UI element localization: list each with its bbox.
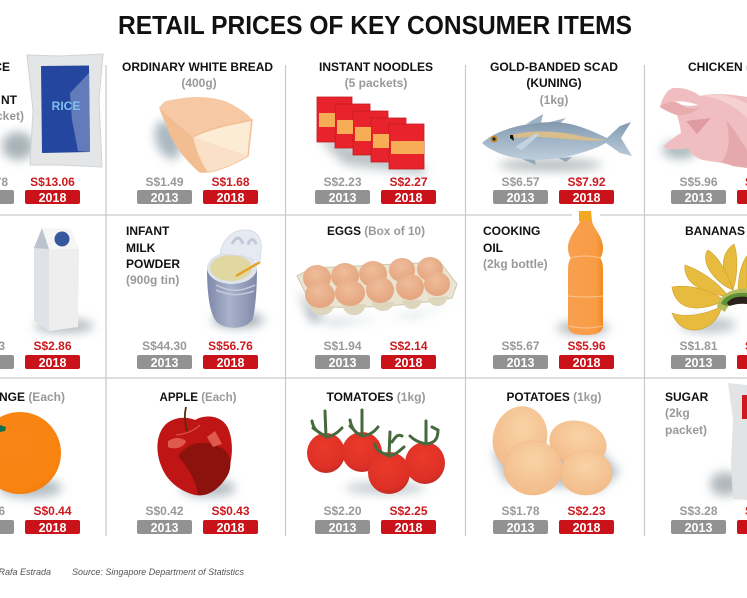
panel: sugar bbox=[665, 383, 747, 535]
noodles prices: 2018 bbox=[395, 191, 422, 205]
rice title: NT bbox=[1, 93, 18, 107]
apple prices: 2013 bbox=[151, 521, 178, 535]
icon: rice bag bbox=[2, 54, 103, 167]
milk prices bbox=[0, 339, 80, 370]
cooking oil title bbox=[483, 224, 548, 271]
bread title: ORDINARY WHITE BREAD bbox=[122, 60, 273, 74]
bread title bbox=[122, 60, 273, 90]
bread prices: S$1.49 bbox=[145, 175, 184, 189]
panel: fish bbox=[482, 60, 632, 205]
sugar title: packet) bbox=[665, 423, 707, 437]
panel: apple bbox=[137, 390, 258, 535]
rice prices bbox=[0, 175, 80, 205]
fish prices: S$6.57 bbox=[501, 175, 540, 189]
cooking oil prices: S$5.67 bbox=[501, 339, 540, 353]
icon: rice bag: RICE bbox=[52, 99, 80, 113]
panel: infant milk powder bbox=[126, 224, 264, 370]
sugar title: SUGAR bbox=[665, 390, 709, 404]
apple prices bbox=[137, 504, 258, 535]
eggs prices: S$2.14 bbox=[389, 339, 428, 353]
infant milk title: INFANT bbox=[126, 224, 170, 238]
tomatoes prices: S$2.20 bbox=[323, 504, 362, 518]
sugar prices: 2013 bbox=[685, 521, 712, 535]
rice prices: 2018 bbox=[39, 191, 66, 205]
apple title: APPLE (Each) bbox=[160, 390, 236, 404]
tomatoes prices bbox=[315, 504, 436, 535]
panel: orange bbox=[0, 390, 80, 535]
cooking oil title: COOKING bbox=[483, 224, 540, 238]
chicken prices bbox=[671, 175, 747, 205]
fish title: (1kg) bbox=[540, 93, 568, 107]
eggs title: EGGS (Box of 10) bbox=[327, 224, 425, 238]
milk prices: 2018 bbox=[39, 356, 66, 370]
orange prices: 2018 bbox=[39, 521, 66, 535]
apple prices: S$0.42 bbox=[145, 504, 184, 518]
icon: orange bbox=[0, 412, 62, 498]
icon: noodle packets bbox=[315, 97, 425, 175]
panel: chicken bbox=[660, 60, 747, 205]
infant milk prices bbox=[137, 339, 258, 370]
fish prices: 2013 bbox=[507, 191, 534, 205]
rice prices: S$13.06 bbox=[30, 175, 75, 189]
chicken prices: 2013 bbox=[685, 191, 712, 205]
icon: chicken bbox=[660, 88, 747, 168]
potatoes title: POTATOES (1kg) bbox=[506, 390, 602, 404]
eggs prices: S$1.94 bbox=[323, 339, 362, 353]
noodles prices: S$2.23 bbox=[323, 175, 362, 189]
panel: bread bbox=[122, 60, 273, 205]
noodles prices: S$2.27 bbox=[389, 175, 428, 189]
infant milk prices: 2018 bbox=[217, 356, 244, 370]
chicken prices: S$5.96 bbox=[679, 175, 718, 189]
noodles title bbox=[319, 60, 433, 90]
sugar prices bbox=[671, 504, 747, 535]
potatoes prices: 2018 bbox=[573, 521, 600, 535]
bananas prices: 2013 bbox=[685, 356, 712, 370]
grid lines bbox=[0, 65, 747, 536]
cooking oil prices: 2013 bbox=[507, 356, 534, 370]
noodles prices: 2013 bbox=[329, 191, 356, 205]
panel: bananas bbox=[671, 224, 747, 370]
bread prices: 2013 bbox=[151, 191, 178, 205]
sugar prices: S$3.28 bbox=[679, 504, 718, 518]
fish title bbox=[490, 60, 618, 107]
cooking oil prices bbox=[493, 339, 614, 370]
sugar title: (2kg bbox=[665, 406, 690, 420]
cooking oil title: OIL bbox=[483, 241, 503, 255]
panel: rice bbox=[0, 54, 103, 205]
icon: oil bottle bbox=[557, 211, 609, 335]
infant milk prices: S$44.30 bbox=[142, 339, 187, 353]
cooking oil prices: S$5.96 bbox=[567, 339, 606, 353]
cooking oil title: (2kg bottle) bbox=[483, 257, 548, 271]
bananas title: BANANAS bbox=[685, 224, 745, 238]
icon: fish bbox=[482, 114, 632, 171]
icon: bread loaf bbox=[150, 97, 252, 173]
fish title: (KUNING) bbox=[526, 76, 582, 90]
potatoes prices: S$2.23 bbox=[567, 504, 606, 518]
eggs prices: 2018 bbox=[395, 356, 422, 370]
rice title bbox=[0, 60, 24, 123]
panel: noodles bbox=[315, 60, 436, 205]
fish prices: S$7.92 bbox=[567, 175, 606, 189]
bread prices bbox=[137, 175, 258, 205]
milk prices: S$2.86 bbox=[33, 339, 72, 353]
icon: apple bbox=[157, 407, 236, 497]
infant milk title bbox=[126, 224, 180, 287]
noodles prices bbox=[315, 175, 436, 205]
potatoes prices: 2013 bbox=[507, 521, 534, 535]
tomatoes prices: S$2.25 bbox=[389, 504, 428, 518]
infant milk prices: 2013 bbox=[151, 356, 178, 370]
bread prices: S$1.68 bbox=[211, 175, 250, 189]
eggs prices: 2013 bbox=[329, 356, 356, 370]
bananas prices: S$1.81 bbox=[679, 339, 718, 353]
orange prices: S$0.44 bbox=[33, 504, 72, 518]
apple prices: S$0.43 bbox=[211, 504, 250, 518]
infant milk title: POWDER bbox=[126, 257, 180, 271]
icon: tomatoes bbox=[307, 410, 445, 494]
noodles title: INSTANT NOODLES bbox=[319, 60, 433, 74]
bread title: (400g) bbox=[181, 76, 217, 90]
infant milk prices: S$56.76 bbox=[208, 339, 253, 353]
panel: cooking oil bbox=[483, 211, 614, 370]
tomatoes prices: 2013 bbox=[329, 521, 356, 535]
infant milk title: (900g tin) bbox=[126, 273, 179, 287]
fish prices bbox=[493, 175, 614, 205]
eggs prices bbox=[315, 339, 436, 370]
panel: tomatoes bbox=[307, 390, 445, 535]
bread prices: 2018 bbox=[217, 191, 244, 205]
potatoes prices: S$1.78 bbox=[501, 504, 540, 518]
credit: Rafa Estrada bbox=[0, 567, 51, 577]
panel: milk bbox=[0, 228, 94, 370]
icon: egg carton bbox=[297, 257, 458, 325]
icon: milk tin bbox=[207, 230, 264, 328]
icon: bananas bbox=[672, 244, 747, 333]
source: Source: Singapore Department of Statistics bbox=[72, 567, 244, 577]
bananas prices bbox=[671, 339, 747, 370]
cooking oil prices: 2018 bbox=[573, 356, 600, 370]
tomatoes title: TOMATOES (1kg) bbox=[326, 390, 426, 404]
fish title: GOLD-BANDED SCAD bbox=[490, 60, 618, 74]
apple prices: 2018 bbox=[217, 521, 244, 535]
tomatoes prices: 2018 bbox=[395, 521, 422, 535]
noodles title: (5 packets) bbox=[345, 76, 407, 90]
orange prices bbox=[0, 504, 80, 535]
fish prices: 2018 bbox=[573, 191, 600, 205]
icon: sugar bag bbox=[710, 383, 747, 500]
panel: potatoes bbox=[486, 390, 620, 535]
sugar title bbox=[665, 390, 709, 437]
icon: milk carton bbox=[34, 228, 94, 333]
title: RETAIL PRICES OF KEY CONSUMER ITEMS bbox=[118, 12, 632, 40]
potatoes prices bbox=[493, 504, 614, 535]
panel: eggs bbox=[297, 224, 458, 370]
icon: potatoes bbox=[486, 400, 620, 495]
infant milk title: MILK bbox=[126, 241, 156, 255]
